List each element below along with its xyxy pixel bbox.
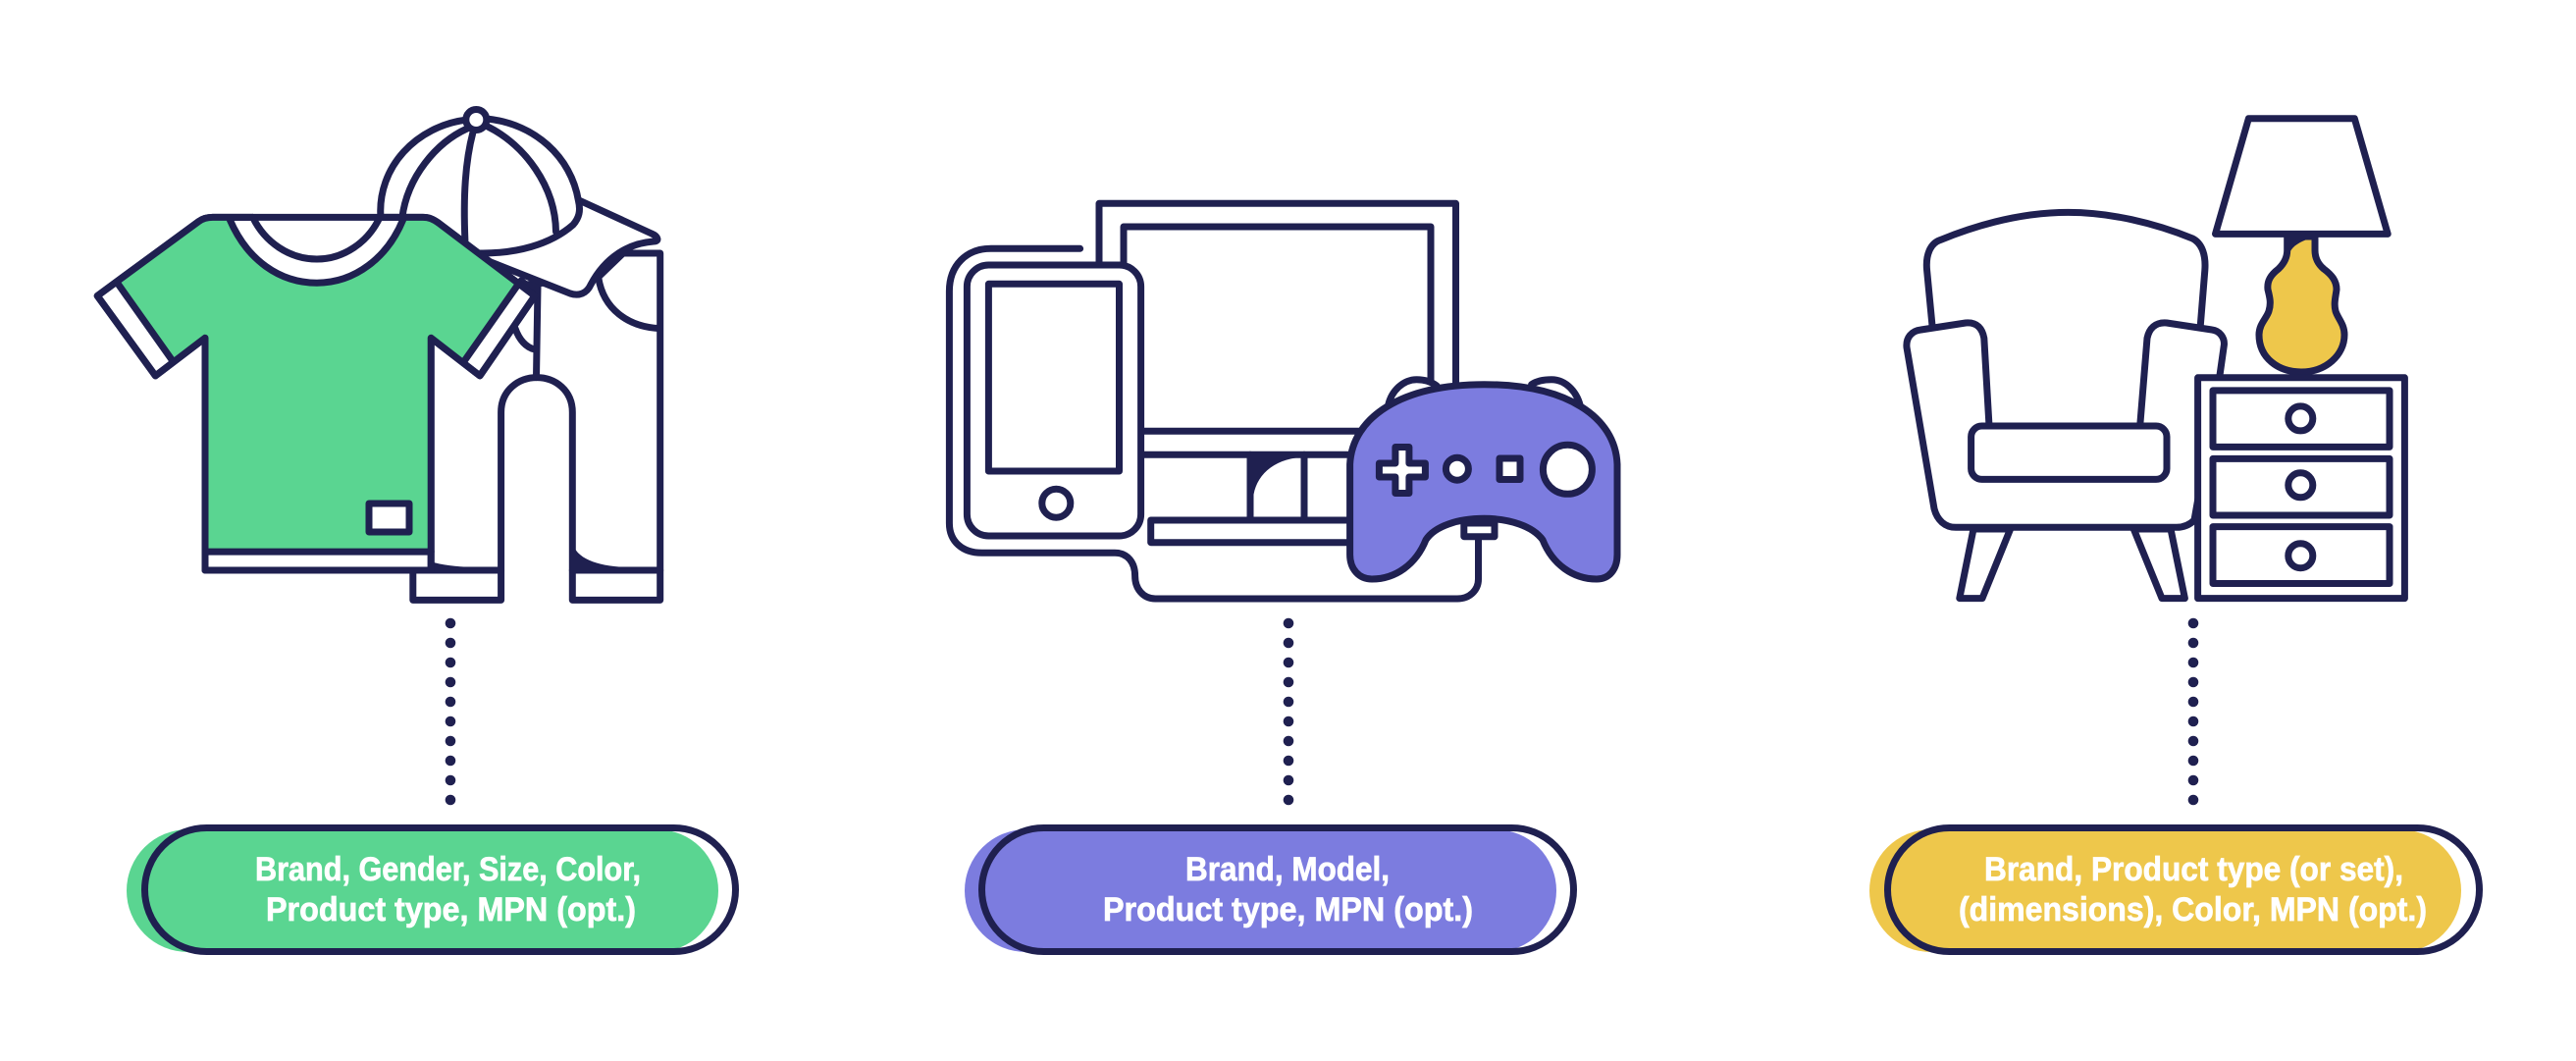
icon: smartphone [967, 265, 1141, 536]
label: apparel attributes: Brand, Gender, Size, Color, [255, 851, 641, 888]
icon: t-shirt [97, 217, 535, 570]
pill: apparel attributes [127, 828, 736, 952]
icon: table lamp [2216, 119, 2388, 372]
label: apparel attributes: Product type, MPN (opt.) [266, 891, 636, 928]
icon: nightstand [2198, 378, 2404, 599]
label: electronics attributes: Product type, MPN (opt.) [1103, 891, 1473, 928]
dotted connector: electronics [1284, 618, 1293, 805]
label: furniture attributes: Brand, Product type (or set), [1984, 851, 2403, 888]
pill: electronics attributes [965, 828, 1574, 952]
pill: furniture attributes [1869, 828, 2479, 952]
icon: armchair [1907, 212, 2224, 599]
icon: baseball cap [381, 110, 657, 294]
panel: electronics [949, 203, 1617, 599]
icon: desktop monitor [1099, 203, 1456, 543]
label: electronics attributes: Brand, Model, [1185, 851, 1390, 888]
panel: apparel [97, 110, 660, 600]
panel: furniture [1907, 119, 2404, 599]
icon: cable [949, 248, 1478, 599]
dotted connector: apparel [446, 618, 455, 805]
icon: trousers [413, 253, 660, 600]
icon: game controller [1350, 380, 1617, 579]
label: furniture attributes: (dimensions), Color, MPN (opt.) [1959, 891, 2427, 928]
dotted connector: furniture [2188, 618, 2198, 805]
